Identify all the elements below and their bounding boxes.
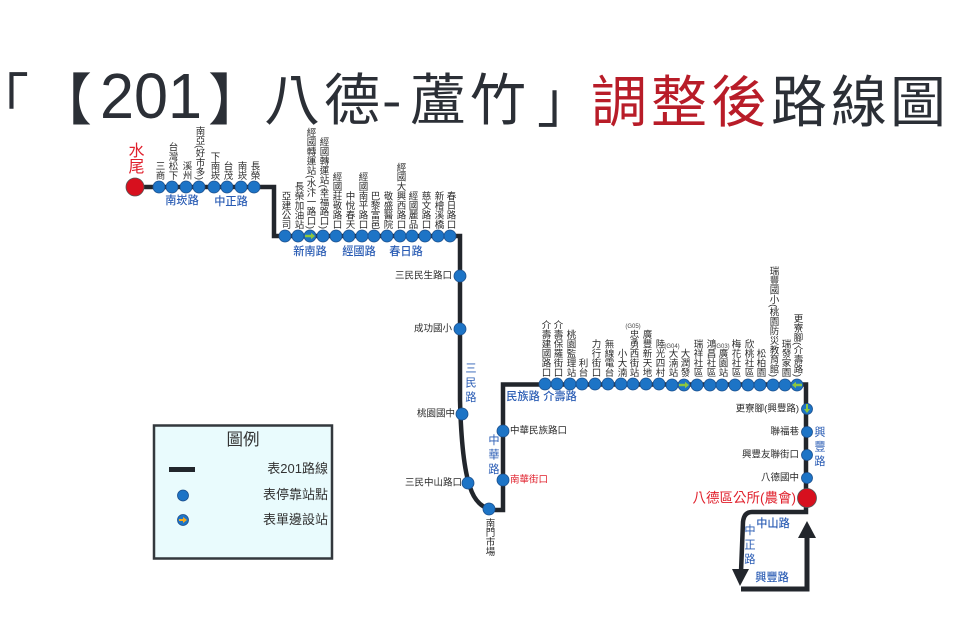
- labels: row 3: 利台: [576, 357, 588, 378]
- labels: row 2: 春日路口: [444, 190, 456, 229]
- terminal: 八德區公所(農會): [692, 488, 816, 508]
- legend: stop: 表停靠站點: [263, 487, 328, 502]
- road names: 中正路: [743, 524, 756, 568]
- labels: row 3: 大湳站: [666, 348, 678, 378]
- legend: route line: 表201路線: [267, 461, 328, 476]
- road names: 中華路: [487, 434, 500, 478]
- road names: 春日路: [389, 244, 423, 258]
- labels: row 3: 松柏園: [754, 348, 766, 378]
- title: 】: [208, 56, 264, 137]
- legend heading: 圖例: [226, 430, 260, 449]
- labels: row 3: [540, 266, 803, 378]
- labels: row 3: (G03): [714, 344, 730, 350]
- labels: 三民路 and 中華路: 三民民生路口: [395, 270, 452, 282]
- labels: row 2: 經國轉運站(水汴一路口): [304, 127, 316, 229]
- stations: row 1: [153, 181, 260, 193]
- one-way stop marker: 更寮腳(介壽路): [792, 382, 802, 388]
- labels: row 3: 鴻昌社區: [704, 338, 716, 377]
- labels: 興豐路: [736, 402, 799, 484]
- labels: row 2: 經國轉運站(幸福路口): [318, 137, 329, 229]
- labels: row 3: 介壽建國路口: [540, 320, 551, 377]
- legend panel: [154, 426, 332, 558]
- road names: 中山路: [756, 516, 790, 530]
- title: 路: [771, 58, 827, 139]
- road names: 民族路: [506, 389, 540, 403]
- labels: row 1: 台灣松下: [166, 141, 178, 181]
- labels: row 2: 經國莊敬路口: [330, 171, 342, 229]
- labels: row 3: (G05): [625, 324, 641, 330]
- legend: one-way stop: 表單邊設站: [263, 512, 328, 527]
- labels: row 3: 力行街口: [590, 338, 601, 377]
- labels: row 2: 慈文路口: [420, 190, 431, 229]
- labels: 三民路 and 中華路: 南門市場: [484, 517, 495, 557]
- arrow: heading down on 中正路: [732, 569, 749, 586]
- road names: 中正路: [214, 194, 248, 208]
- title: 圖: [890, 58, 946, 139]
- labels: row 3: 桃園監理站: [564, 329, 576, 378]
- arrow: heading up on 興豐路: [798, 521, 816, 538]
- labels: row 3: 梅花社區: [730, 338, 741, 377]
- title: 【: [36, 56, 92, 137]
- labels: row 1: [154, 126, 260, 181]
- road names: 南崁路: [165, 193, 199, 207]
- title: 後: [711, 58, 767, 139]
- labels: 三民路 and 中華路: 成功國小: [414, 322, 452, 334]
- labels: 興豐路: 興豐友聯街口: [742, 448, 799, 460]
- stations: 三民路 and 中華路: [454, 270, 509, 515]
- one-way stop marker: 水汴一路口: [305, 233, 315, 239]
- legend: one-way stop: [178, 512, 328, 527]
- terminal: 八德區公所(農會): 八德區公所(農會): [692, 490, 796, 506]
- title: 線: [831, 58, 887, 139]
- title: 八: [264, 56, 320, 137]
- labels: row 1: 長榮: [248, 161, 260, 181]
- title: 調: [591, 58, 647, 139]
- labels: row 2: 新檜溪橋: [432, 190, 444, 230]
- labels: row 3: 瑞豐國小(桃園防災教育館): [768, 266, 779, 377]
- road names: 興豐路: [755, 570, 789, 584]
- labels: row 3: 大潤發: [678, 348, 690, 378]
- labels: 三民路 and 中華路: 南華街口: [510, 474, 548, 486]
- labels: row 2: [280, 127, 456, 230]
- labels: row 3: 無線電台: [602, 338, 614, 378]
- title: 」: [537, 58, 593, 139]
- one-way stop marker: 更寮腳(興豐路): [804, 404, 810, 413]
- one-way stop marker: 大潤發: [679, 382, 689, 388]
- labels: 三民路 and 中華路: 中華民族路口: [510, 424, 567, 436]
- labels: 三民路 and 中華路: [395, 270, 567, 557]
- labels: row 1: 下南崁: [208, 152, 220, 181]
- labels: row 2: 巴黎富邑: [368, 191, 380, 229]
- labels: row 3: 介壽保羅街口: [552, 320, 563, 377]
- terminal: 水尾: [126, 142, 144, 196]
- labels: row 3: 廣園站: [716, 348, 728, 378]
- labels: row 1: 南亞(好市多): [194, 126, 205, 180]
- labels: row 1: 台茂: [222, 160, 233, 181]
- stations: 興豐路: [802, 404, 812, 484]
- labels: row 1: 南崁: [236, 160, 247, 181]
- road names: 介壽路: [543, 389, 577, 403]
- labels: row 3: 忠勇西街站: [628, 330, 639, 378]
- road names: [165, 193, 826, 584]
- labels: 三民路 and 中華路: 三民中山路口: [405, 476, 462, 488]
- labels: row 3: 瑞祥社區: [692, 338, 703, 377]
- labels: row 2: 經國南平路口: [356, 171, 368, 229]
- labels: row 2: 亞建公司: [280, 191, 291, 229]
- road names: 興豐路: [813, 426, 826, 470]
- labels: 興豐路: 八德國中: [761, 472, 799, 484]
- title: 竹: [470, 56, 526, 137]
- labels: row 2: 中悅春天: [344, 190, 355, 230]
- labels: row 2: 經國麗品: [406, 190, 418, 230]
- labels: row 3: 小大湳: [616, 348, 627, 377]
- labels: row 3: 更寮腳(介壽路): [792, 314, 803, 377]
- labels: row 1: 三商: [154, 161, 165, 181]
- labels: row 3: 陸光四村: [654, 339, 665, 377]
- labels: 興豐路: 聯福巷: [770, 426, 799, 438]
- title: 整: [651, 58, 707, 139]
- labels: 興豐路: 更寮腳(興豐路): [736, 402, 799, 414]
- title: 德: [324, 56, 380, 137]
- legend: route line: [169, 461, 328, 476]
- title: 蘆: [410, 56, 466, 137]
- labels: row 3: 欣桃社區: [742, 338, 754, 377]
- title: -: [382, 56, 401, 137]
- labels: row 2: 經國大興西路口: [394, 162, 406, 229]
- road names: 三民路: [464, 362, 477, 406]
- stations: row 2: [279, 230, 456, 242]
- title: [0, 56, 946, 139]
- labels: row 1: 溪州: [180, 160, 192, 180]
- labels: row 3: 瑞發家園: [780, 338, 791, 378]
- stations: row 3: [539, 378, 803, 391]
- legend: stop: [178, 487, 328, 502]
- labels: row 3: 廣豐新天地: [640, 329, 652, 377]
- terminal: 水尾: 水尾: [126, 142, 144, 174]
- labels: 三民路 and 中華路: 桃園國中: [417, 408, 455, 420]
- labels: row 3: (G04): [664, 344, 680, 350]
- road names: 經國路: [342, 244, 376, 258]
- labels: row 2: 敬盛醫院: [382, 190, 393, 230]
- route line: [135, 187, 807, 589]
- title: 201: [100, 60, 202, 132]
- road names: 新南路: [293, 244, 327, 258]
- labels: row 2: 長榮加油站: [292, 182, 304, 230]
